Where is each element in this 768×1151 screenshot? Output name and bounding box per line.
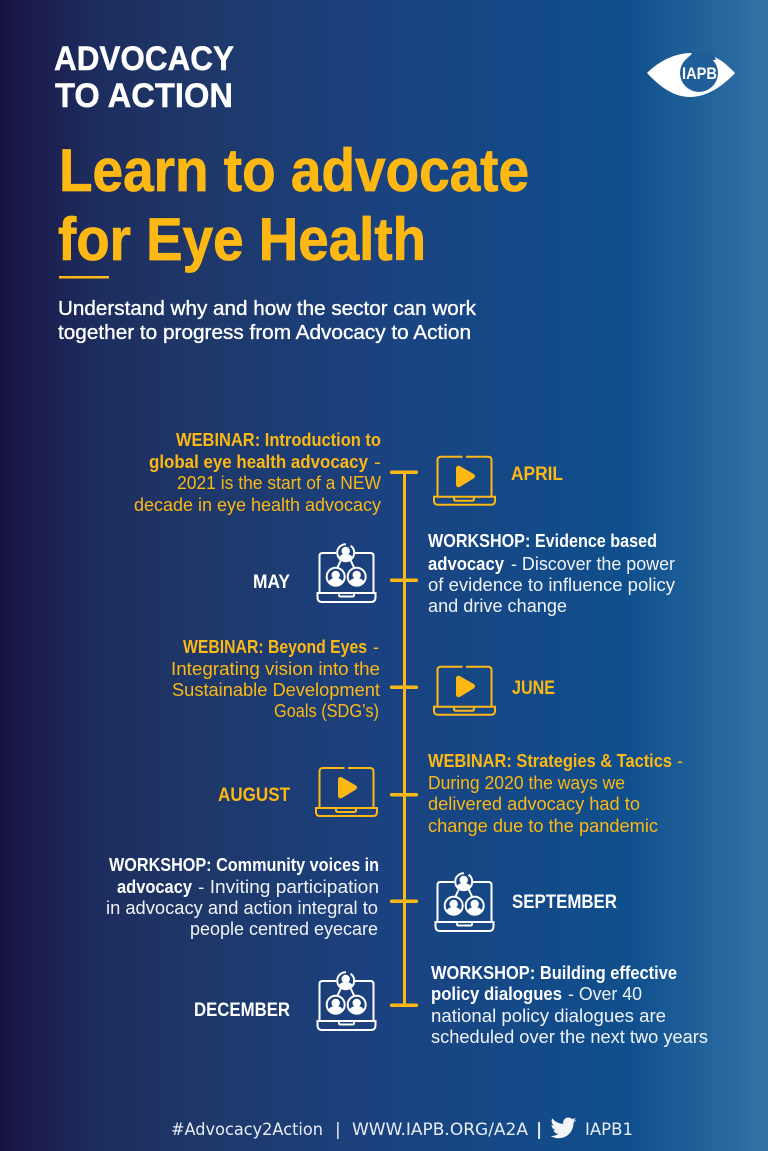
december text — [431, 963, 708, 1047]
subtitle: together to progress from Advocacy to Action — [58, 322, 471, 344]
footer: #Advocacy2Action — [171, 1120, 323, 1140]
subtitle — [58, 298, 477, 344]
title: for Eye Health — [58, 206, 426, 273]
header label: ADVOCACY — [54, 40, 234, 78]
month: april: APRIL — [511, 463, 563, 485]
december text: policy dialogues — [431, 984, 562, 1004]
title — [58, 137, 529, 273]
september text: WORKSHOP: Community voices in — [109, 855, 379, 875]
september text: in advocacy and action integral to — [106, 898, 378, 918]
september text: advocacy — [117, 877, 192, 897]
september text: people centred eyecare — [190, 919, 378, 939]
month: august: AUGUST — [218, 784, 290, 806]
september text — [106, 855, 379, 939]
month: may: MAY — [253, 571, 290, 593]
august text: WEBINAR: Strategies & Tactics — [428, 751, 672, 771]
december text: - Over 40 — [568, 984, 642, 1004]
icon: workshop laptop may — [318, 544, 376, 602]
footer: IAPB1 — [585, 1120, 633, 1140]
footer: | — [536, 1120, 542, 1140]
logo: IAPB eye: IAPB — [682, 64, 717, 83]
april text: decade in eye health advocacy — [134, 495, 381, 515]
may text — [428, 531, 675, 616]
icon: webinar laptop june — [434, 667, 495, 715]
april text: global eye health advocacy — [149, 452, 368, 472]
august text — [428, 751, 683, 836]
icon: workshop laptop september — [436, 873, 494, 931]
june text — [171, 637, 380, 721]
december text: WORKSHOP: Building effective — [431, 963, 677, 983]
footer: WWW.IAPB.ORG/A2A — [352, 1120, 528, 1140]
footer: | — [335, 1120, 341, 1140]
subtitle: Understand why and how the sector can work — [58, 298, 477, 320]
december text: scheduled over the next two years — [431, 1027, 708, 1047]
september text: - Inviting participation — [198, 877, 379, 897]
june text: Goals (SDG’s) — [274, 701, 379, 721]
august text: delivered advocacy had to — [428, 794, 640, 814]
june text: WEBINAR: Beyond Eyes — [183, 637, 367, 657]
month: december: DECEMBER — [194, 999, 290, 1021]
title underline — [59, 276, 109, 278]
logo: IAPB eye — [647, 52, 735, 97]
december text: national policy dialogues are — [431, 1006, 666, 1026]
footer — [171, 1117, 633, 1140]
june text: - — [373, 637, 379, 657]
header label — [54, 40, 234, 115]
june text: Sustainable Development — [172, 680, 380, 700]
june text: Integrating vision into the — [171, 659, 380, 679]
august text: - — [677, 751, 683, 771]
may text: - Discover the power — [511, 554, 675, 574]
april text: WEBINAR: Introduction to — [176, 430, 381, 450]
august text: During 2020 the ways we — [428, 773, 625, 793]
header label: TO ACTION — [55, 77, 233, 115]
april text — [134, 430, 381, 515]
april text: - — [374, 452, 381, 472]
august text: change due to the pandemic — [428, 816, 658, 836]
icon: webinar laptop august — [316, 768, 377, 816]
may text: WORKSHOP: Evidence based — [428, 531, 657, 551]
title: Learn to advocate — [59, 137, 529, 204]
icon: twitter bird — [550, 1117, 576, 1138]
month: september: SEPTEMBER — [512, 891, 617, 913]
may text: advocacy — [428, 554, 504, 574]
icon: webinar laptop april — [434, 457, 495, 505]
may text: of evidence to influence policy — [428, 575, 675, 595]
may text: and drive change — [428, 596, 567, 616]
month: june: JUNE — [512, 677, 555, 699]
april text: 2021 is the start of a NEW — [177, 473, 381, 493]
icon: workshop laptop december — [318, 972, 376, 1030]
timeline axis — [390, 470, 418, 1007]
